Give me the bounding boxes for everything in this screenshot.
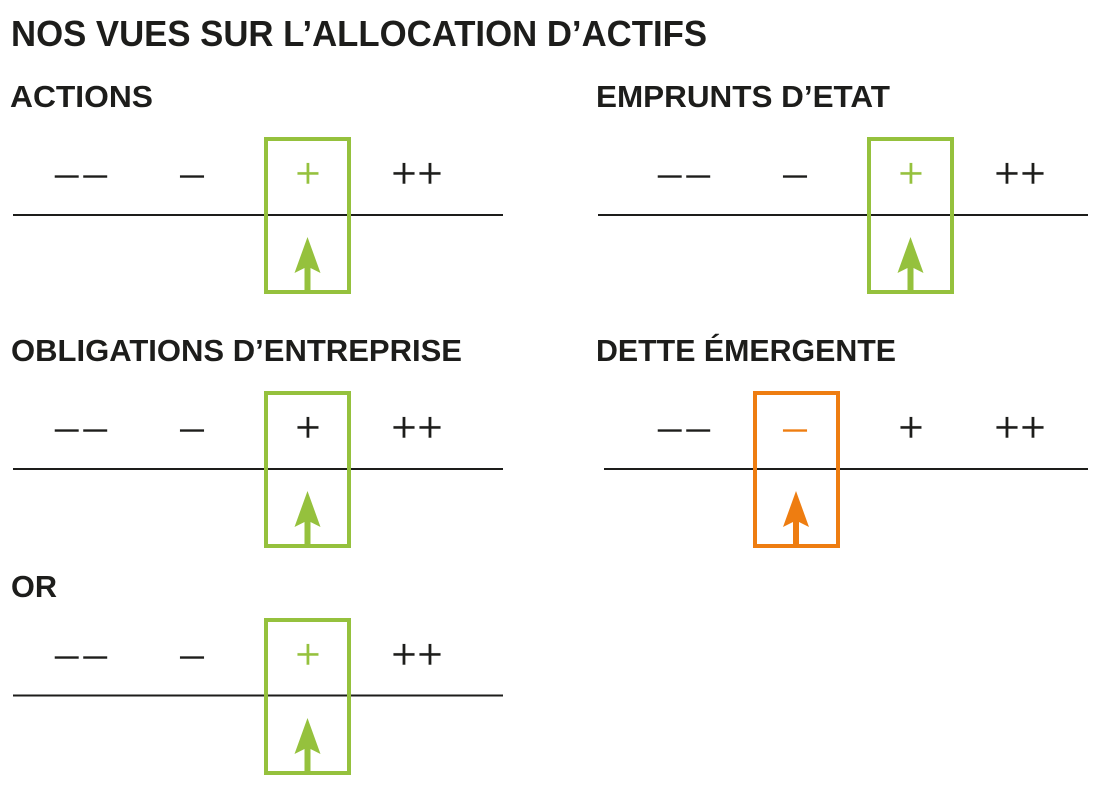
- panel: actions: [10, 79, 503, 292]
- scale symbols: emprunts d'etat: ––: [658, 148, 714, 198]
- heading: emprunts d'etat: EMPRUNTS D’ETAT: [596, 79, 890, 114]
- scale symbols: actions: ++: [391, 149, 443, 198]
- panel: obligations d'entreprise: [11, 333, 503, 546]
- scale symbols: or: –: [180, 630, 205, 678]
- arrow: actions: [294, 237, 320, 291]
- highlight box: or: [266, 620, 349, 773]
- scale symbols: emprunts d'etat: [658, 148, 1046, 198]
- heading: actions: ACTIONS: [10, 79, 153, 114]
- scale symbols: obligations d'entreprise: –: [180, 402, 205, 452]
- scale symbols: obligations d'entreprise: [55, 402, 443, 452]
- scale symbols: dette emergente: [658, 402, 1046, 452]
- scale symbols: or: +: [295, 630, 321, 679]
- panel: or: [11, 569, 503, 773]
- arrow: obligations d'entreprise: [294, 491, 320, 545]
- scale symbols: emprunts d'etat: –: [783, 148, 808, 198]
- scale symbols: or: ++: [391, 630, 443, 679]
- scale symbols: emprunts d'etat: +: [898, 149, 924, 198]
- heading: or: OR: [11, 569, 57, 604]
- highlight box: emprunts d'etat: [869, 139, 952, 292]
- title: NOS VUES SUR L’ALLOCATION D’ACTIFS: [11, 13, 707, 54]
- arrow: emprunts d'etat: [898, 237, 924, 291]
- heading: obligations d'entreprise: OBLIGATIONS D’ENTREPRISE: [11, 333, 462, 368]
- scale symbols: or: ––: [55, 630, 111, 678]
- scale symbols: obligations d'entreprise: +: [295, 403, 321, 452]
- panel: emprunts d'etat: [596, 79, 1088, 292]
- scale symbols: dette emergente: +: [898, 403, 924, 452]
- highlight box: dette emergente: [755, 393, 838, 546]
- highlight box: obligations d'entreprise: [266, 393, 349, 546]
- scale symbols: obligations d'entreprise: ––: [55, 402, 111, 452]
- scale symbols: emprunts d'etat: ++: [994, 149, 1046, 198]
- scale symbols: obligations d'entreprise: ++: [391, 403, 443, 452]
- heading: dette emergente: DETTE ÉMERGENTE: [596, 333, 896, 368]
- scale symbols: actions: –: [180, 148, 205, 198]
- scale symbols: dette emergente: ––: [658, 402, 714, 452]
- scale symbols: actions: +: [295, 149, 321, 198]
- arrow: dette emergente: [783, 491, 809, 545]
- arrow: or: [294, 718, 320, 772]
- scale symbols: dette emergente: –: [783, 402, 808, 452]
- scale symbols: actions: ––: [55, 148, 111, 198]
- panel: dette emergente: [596, 333, 1088, 546]
- scale symbols: dette emergente: ++: [994, 403, 1046, 452]
- highlight box: actions: [266, 139, 349, 292]
- scale symbols: actions: [55, 148, 443, 198]
- scale symbols: or: [55, 630, 443, 679]
